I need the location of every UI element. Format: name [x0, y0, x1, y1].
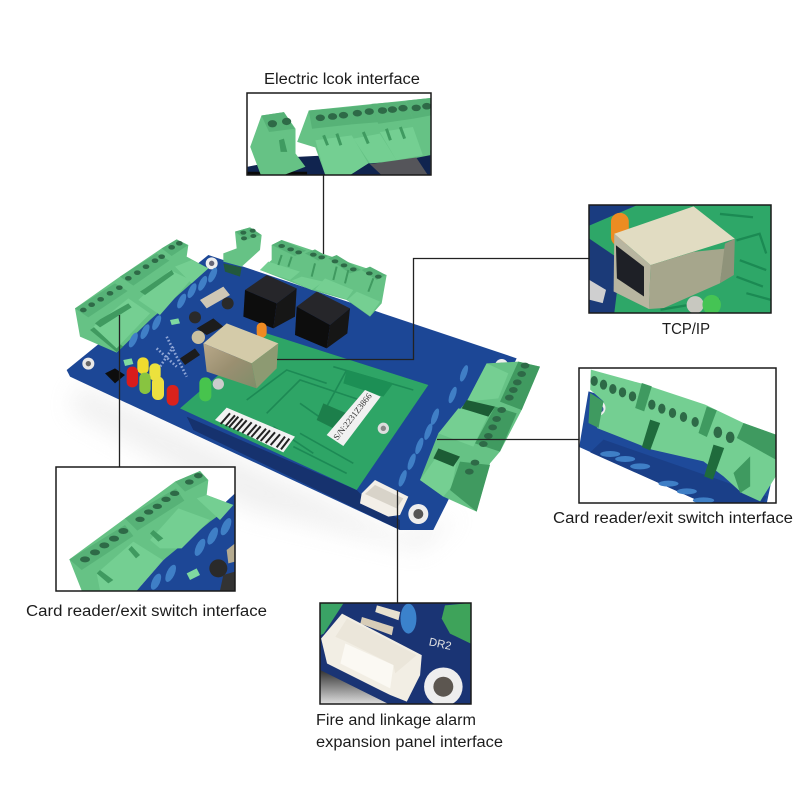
leader line: right card reader	[437, 438, 579, 440]
mounting holes	[82, 257, 508, 524]
label: TCP/IP: TCP/IP	[662, 321, 710, 338]
leader line: electric lock	[322, 175, 324, 254]
inset photo: white connector	[320, 604, 470, 704]
leader line: TCP/IP	[277, 258, 589, 360]
panel: electric lock interface	[247, 71, 431, 175]
inset photo: RJ45 jack	[590, 206, 770, 312]
main circuit board photo	[67, 227, 540, 530]
label: left card reader: Card reader/exit switch interface	[26, 603, 267, 620]
label: fire alarm line 2: expansion panel interface	[316, 734, 503, 751]
leader line: left card reader	[118, 315, 120, 467]
right terminal blocks	[420, 362, 540, 512]
blue PCB base	[67, 255, 517, 530]
panel: TCP/IP interface	[589, 205, 771, 338]
label: right card reader: Card reader/exit switch interface	[553, 510, 793, 527]
green network module	[180, 333, 428, 490]
orange LED	[257, 323, 267, 338]
PCB lower edge	[187, 417, 400, 530]
label: fire alarm line 1: Fire and linkage alarm	[316, 712, 476, 729]
panel: fire and linkage alarm interface	[316, 603, 503, 751]
relays	[243, 275, 350, 348]
blue capacitors left	[127, 266, 219, 349]
panel: right card reader interface	[553, 368, 793, 527]
barcode label	[215, 408, 295, 452]
indicator LEDs	[127, 357, 211, 406]
heading: electric lock: Electric lcok interface	[264, 71, 420, 88]
inset photo: white connector: DR2	[428, 636, 452, 653]
left terminal blocks	[75, 239, 208, 353]
inset photo: right terminal blocks	[580, 370, 776, 502]
white connector	[360, 480, 408, 517]
panel: left card reader interface	[26, 467, 267, 620]
board shadow	[70, 385, 460, 550]
top terminal blocks	[260, 240, 387, 317]
inset photo: electric lock terminals	[248, 98, 430, 174]
serial number label: S/N:2231Z3866	[331, 391, 374, 442]
leader line: fire alarm	[396, 490, 398, 603]
inset photo: left terminal blocks	[69, 468, 234, 590]
RJ45 jack	[203, 323, 278, 388]
free standing terminal block	[223, 227, 262, 277]
small components	[105, 287, 234, 390]
blue capacitors right	[397, 364, 470, 488]
